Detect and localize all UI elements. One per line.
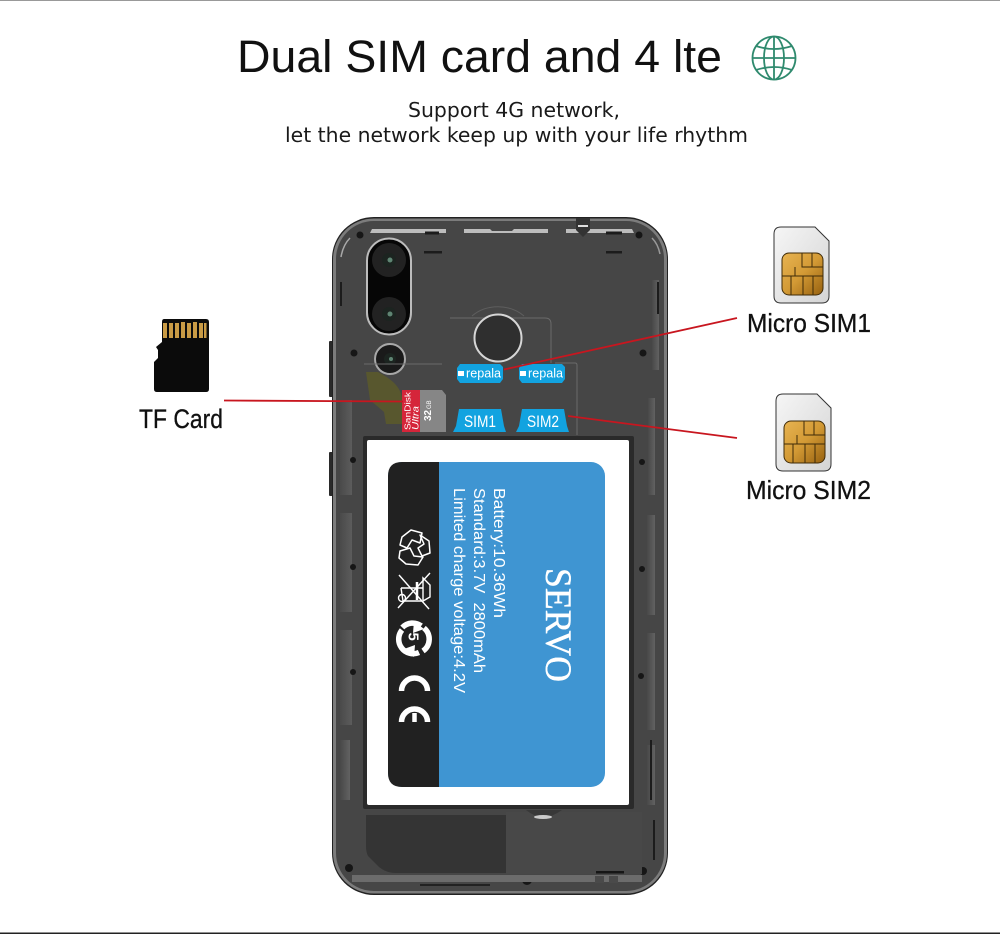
label: TF Card: TF Card <box>139 404 223 434</box>
sim bay outline <box>364 318 577 435</box>
icon: recycle <box>399 530 430 565</box>
side strips <box>340 400 352 725</box>
SIM labels: repala <box>457 364 565 383</box>
SIM slot labels: SIM2 <box>527 412 559 431</box>
speaker slots <box>340 232 659 860</box>
top bright strip <box>370 229 634 233</box>
SIM labels: repala: repala <box>466 366 502 380</box>
battery specs <box>450 488 507 694</box>
battery specs: Standard:3.7V 2800mAh <box>470 488 487 673</box>
battery label dark strip <box>388 462 439 787</box>
callout line: SIM2 <box>568 416 737 438</box>
title: Dual SIM card and 4 lte <box>237 31 722 82</box>
SIM slot labels: SIM1 <box>464 412 496 431</box>
subtitle: let the network keep up with your life rhythm <box>285 123 748 147</box>
icon: 5 year cycle <box>399 621 429 657</box>
flex circuit <box>366 372 402 424</box>
microSD card in phone: GB <box>427 400 433 409</box>
microSD card in phone: 32 <box>423 409 434 421</box>
microSD card in phone: Ultra <box>410 406 420 430</box>
label: Micro SIM1: Micro SIM1 <box>747 308 871 338</box>
icon: crossed-out bin <box>398 573 430 609</box>
SIM labels: repala: repala <box>528 366 564 380</box>
battery specs: Limited charge voltage:4.2V <box>450 488 467 694</box>
battery specs: Battery:10.36Wh <box>490 488 507 618</box>
phone outer shell <box>332 217 668 895</box>
corner highlights <box>341 238 350 257</box>
battery label panel <box>388 462 605 787</box>
callout line: SIM1 <box>504 318 737 370</box>
icon: CE mark <box>402 678 428 722</box>
callout line: TF card <box>224 400 403 402</box>
subtitle <box>285 98 748 147</box>
microSD card in phone: SanDisk <box>402 391 412 430</box>
battery cavity <box>363 436 634 809</box>
microSD card in phone <box>402 390 446 432</box>
label: Micro SIM2: Micro SIM2 <box>746 475 871 505</box>
battery brand: SERVO <box>537 568 578 682</box>
battery <box>367 440 629 805</box>
icon: microSD card <box>154 319 209 392</box>
fingerprint sensor <box>472 307 524 362</box>
icon: SIM card 1 <box>774 227 829 303</box>
icon: globe <box>752 36 796 80</box>
icon: 5 year cycle: 5 <box>404 632 422 641</box>
camera module <box>367 238 411 374</box>
side buttons <box>329 341 333 496</box>
SIM slot labels <box>453 409 569 432</box>
screws <box>345 232 647 885</box>
subtitle: Support 4G network, <box>408 98 620 122</box>
lower compartment <box>352 810 642 886</box>
icon: SIM card 2 <box>776 394 831 471</box>
phone: rear interior <box>329 217 668 895</box>
